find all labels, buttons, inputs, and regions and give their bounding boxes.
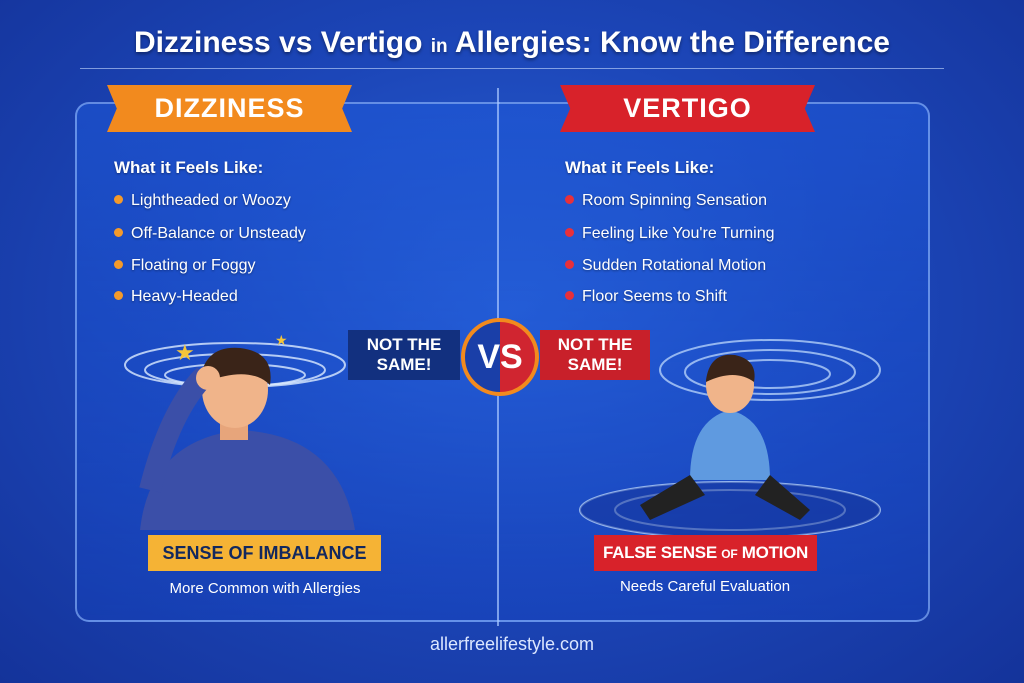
not the same: right: SAME! — [568, 355, 622, 374]
caption: dizziness: More Common with Allergies — [170, 580, 360, 597]
list: vertigo: What it Feels Like: — [565, 158, 714, 177]
not the same: left: NOT THE — [367, 335, 441, 354]
not the same: right — [540, 330, 650, 380]
label: sense of imbalance — [148, 535, 381, 571]
list: dizziness: Floating or Foggy — [131, 257, 256, 274]
list: dizziness: Heavy-Headed — [131, 288, 238, 305]
not the same: left: SAME! — [377, 355, 431, 374]
label: sense of imbalance: SENSE OF IMBALANCE — [162, 543, 366, 563]
vs badge — [348, 318, 650, 396]
caption: vertigo: Needs Careful Evaluation — [620, 578, 790, 595]
illustration: vertigo person — [579, 339, 881, 535]
vs circle — [461, 318, 539, 396]
ribbon: dizziness: DIZZINESS — [154, 93, 304, 123]
not the same: left — [348, 330, 460, 380]
panel: vertigo — [498, 102, 930, 622]
ribbon: vertigo — [560, 85, 815, 132]
label: false sense of motion — [594, 535, 817, 571]
illustration: dizzy person: ★ — [275, 332, 288, 348]
list: vertigo — [564, 158, 775, 305]
list: vertigo: Floor Seems to Shift — [582, 288, 727, 305]
list: vertigo: Sudden Rotational Motion — [582, 257, 766, 274]
list: vertigo: Room Spinning Sensation — [582, 192, 767, 209]
list: dizziness: Off-Balance or Unsteady — [131, 225, 306, 242]
illustration: dizzy person — [124, 332, 355, 530]
not the same: right: NOT THE — [558, 335, 632, 354]
footer: allerfreelifestyle.com — [430, 634, 594, 654]
list: dizziness — [113, 158, 306, 306]
list: vertigo: Feeling Like You're Turning — [582, 225, 775, 242]
vs circle: VS — [477, 338, 523, 376]
list: dizziness: Lightheaded or Woozy — [131, 192, 291, 209]
ribbon: dizziness — [107, 85, 352, 132]
label: false sense of motion: FALSE SENSE OF MOTION — [603, 543, 808, 562]
list: dizziness: What it Feels Like: — [114, 158, 263, 177]
ribbon: vertigo: VERTIGO — [623, 93, 752, 123]
illustration: dizzy person: ★ — [175, 340, 195, 365]
title: Dizziness vs Vertigo in Allergies: Know the Difference — [134, 26, 890, 59]
panel: dizziness — [75, 102, 500, 622]
